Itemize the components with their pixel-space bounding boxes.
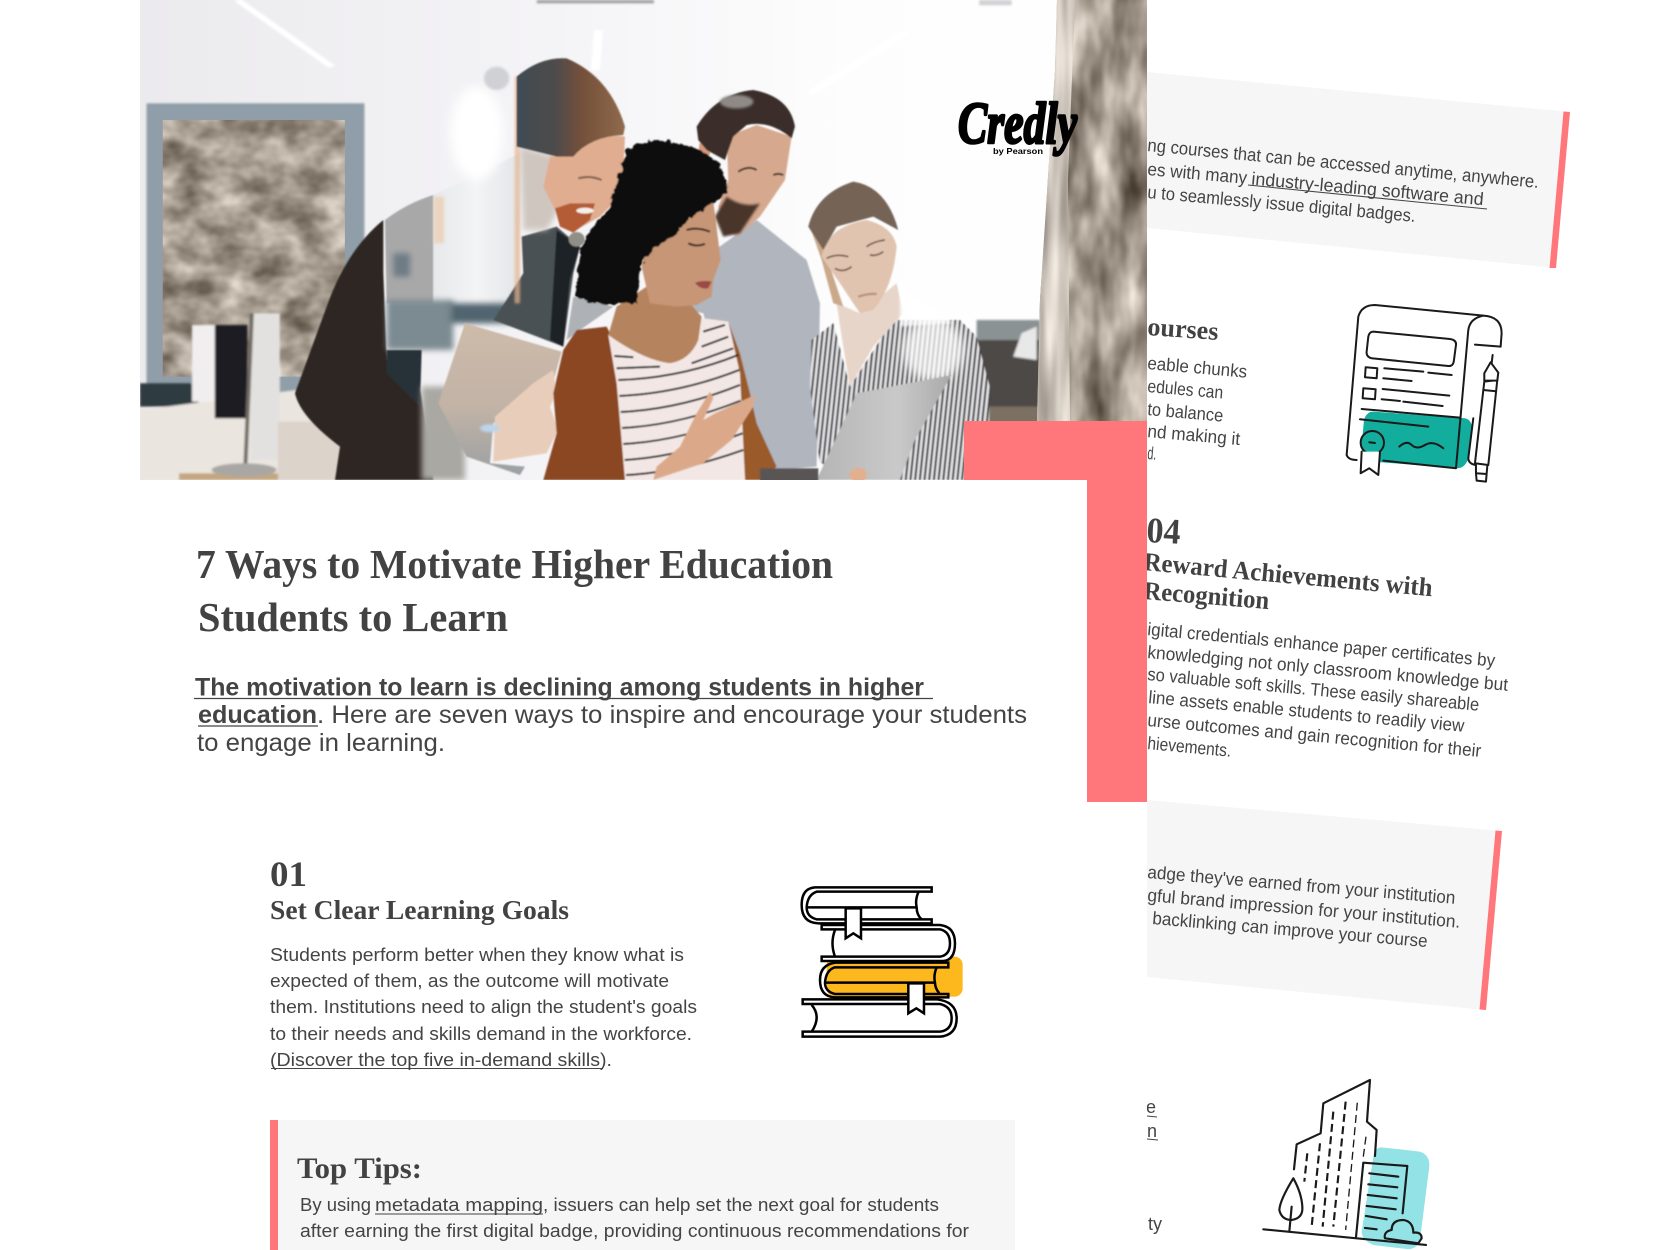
section 01: set clear learning goals: to their needs and skills demand in the workforce.	[270, 1024, 692, 1044]
section 01: set clear learning goals: Set Clear Learning Goals	[270, 895, 569, 925]
section 01: set clear learning goals: them. Institutions need to align the student's goals	[270, 997, 697, 1017]
section 05 text fragment	[1147, 1103, 1162, 1234]
section 03 text fragment: nd making it	[1147, 421, 1241, 449]
intro paragraph: . Here are seven ways to inspire and encourage your students	[317, 701, 1027, 729]
section 04: reward achievements: Recognition	[1143, 576, 1271, 615]
man at back	[567, 90, 820, 473]
section 05 text fragment: n	[1147, 1121, 1157, 1141]
logo: Credly by Pearson: Credly	[958, 90, 1078, 156]
section 04: reward achievements: urse outcomes and gain recognition for their	[1147, 710, 1482, 761]
panel: top tips	[270, 1120, 1015, 1250]
man on left	[295, 58, 625, 480]
section 04: reward achievements: hievements.	[1147, 733, 1232, 761]
panel: top tip box: es with many	[1147, 159, 1248, 188]
section 05 text fragment: ty	[1148, 1214, 1162, 1234]
panel: top tip box: ng courses that can be accessed anytime, anywhere.	[1147, 135, 1540, 192]
panel: lower tip box: gful brand impression for your institution.	[1147, 885, 1461, 932]
section 04: reward achievements: line assets enable students to readily view	[1148, 687, 1466, 736]
section 04: reward achievements: Reward Achievements with	[1142, 547, 1434, 602]
panel: top tips: By using	[300, 1195, 371, 1215]
office background: window, lights and desk	[140, 0, 1012, 480]
logo: Credly by Pearson: by Pearson	[993, 146, 1043, 156]
woman in centre	[543, 140, 777, 480]
section 04: reward achievements: so valuable soft skills. These easily shareable	[1147, 664, 1480, 715]
panel: lower tip box: backlinking can improve your course	[1152, 908, 1428, 951]
title: Students to Learn	[198, 594, 508, 640]
woman on right with laptop	[760, 182, 990, 482]
intro paragraph: education	[198, 701, 317, 729]
panel: top tip box: industry-leading software and	[1251, 169, 1484, 209]
title: 7 Ways to Motivate Higher Education	[196, 541, 833, 587]
icon: buildings and tree	[1263, 1080, 1429, 1249]
intro paragraph: to engage in learning.	[197, 729, 445, 757]
section 01: set clear learning goals: Students perform better when they know what is	[270, 945, 684, 965]
back room seen past the column	[977, 320, 1040, 423]
panel: top tips: after earning the first digital badge, providing continuous recommendations for	[300, 1221, 969, 1241]
coral corner bracket	[964, 421, 1147, 802]
intro paragraph: The motivation to learn is declining among students in higher	[195, 674, 924, 702]
section 03 text fragment: d.	[1147, 443, 1157, 464]
panel: top tip box: u to seamlessly issue digital badges.	[1147, 182, 1416, 226]
section 04: reward achievements: knowledging not only classroom knowledge but	[1147, 642, 1509, 695]
section 04: reward achievements	[1142, 510, 1509, 761]
section 01: set clear learning goals: expected of them, as the outcome will motivate	[270, 971, 669, 991]
section 03 text fragment: ourses	[1147, 312, 1219, 346]
section 05 text fragment: e	[1146, 1097, 1156, 1117]
panel: top tips: Top Tips:	[297, 1152, 422, 1185]
section 03 text fragment: to balance	[1147, 399, 1224, 426]
panel: lower tip box: adge they've earned from your institution	[1147, 862, 1456, 908]
section 03 text fragment: eable chunks	[1147, 353, 1248, 382]
panel: top tips: metadata mapping	[375, 1195, 543, 1215]
section 01: set clear learning goals: 01	[270, 854, 307, 894]
panel: lower tip box	[1147, 800, 1502, 1010]
section 03 text fragment: edules can	[1147, 376, 1224, 403]
section 01: set clear learning goals	[270, 854, 697, 1070]
panel: top tip box	[1147, 72, 1570, 268]
right page: tilted second sheet	[1142, 72, 1570, 1249]
panel: top tips: , issuers can help set the next goal for students	[543, 1195, 939, 1215]
icon: certificate and pen	[1347, 305, 1502, 482]
intro paragraph	[194, 674, 1027, 757]
icon: stack of books	[802, 887, 963, 1037]
section 03 text fragment	[1148, 323, 1246, 460]
concrete column	[1037, 0, 1147, 421]
title	[196, 541, 833, 640]
section 04: reward achievements: 04	[1146, 510, 1182, 552]
section 04: reward achievements: igital credentials enhance paper certificates by	[1147, 619, 1496, 671]
people, drawn at photo scale	[295, 58, 990, 482]
photo: four colleagues looking at a laptop	[140, 0, 1147, 482]
section 01: set clear learning goals: (Discover the top five in-demand skills).	[270, 1050, 612, 1070]
